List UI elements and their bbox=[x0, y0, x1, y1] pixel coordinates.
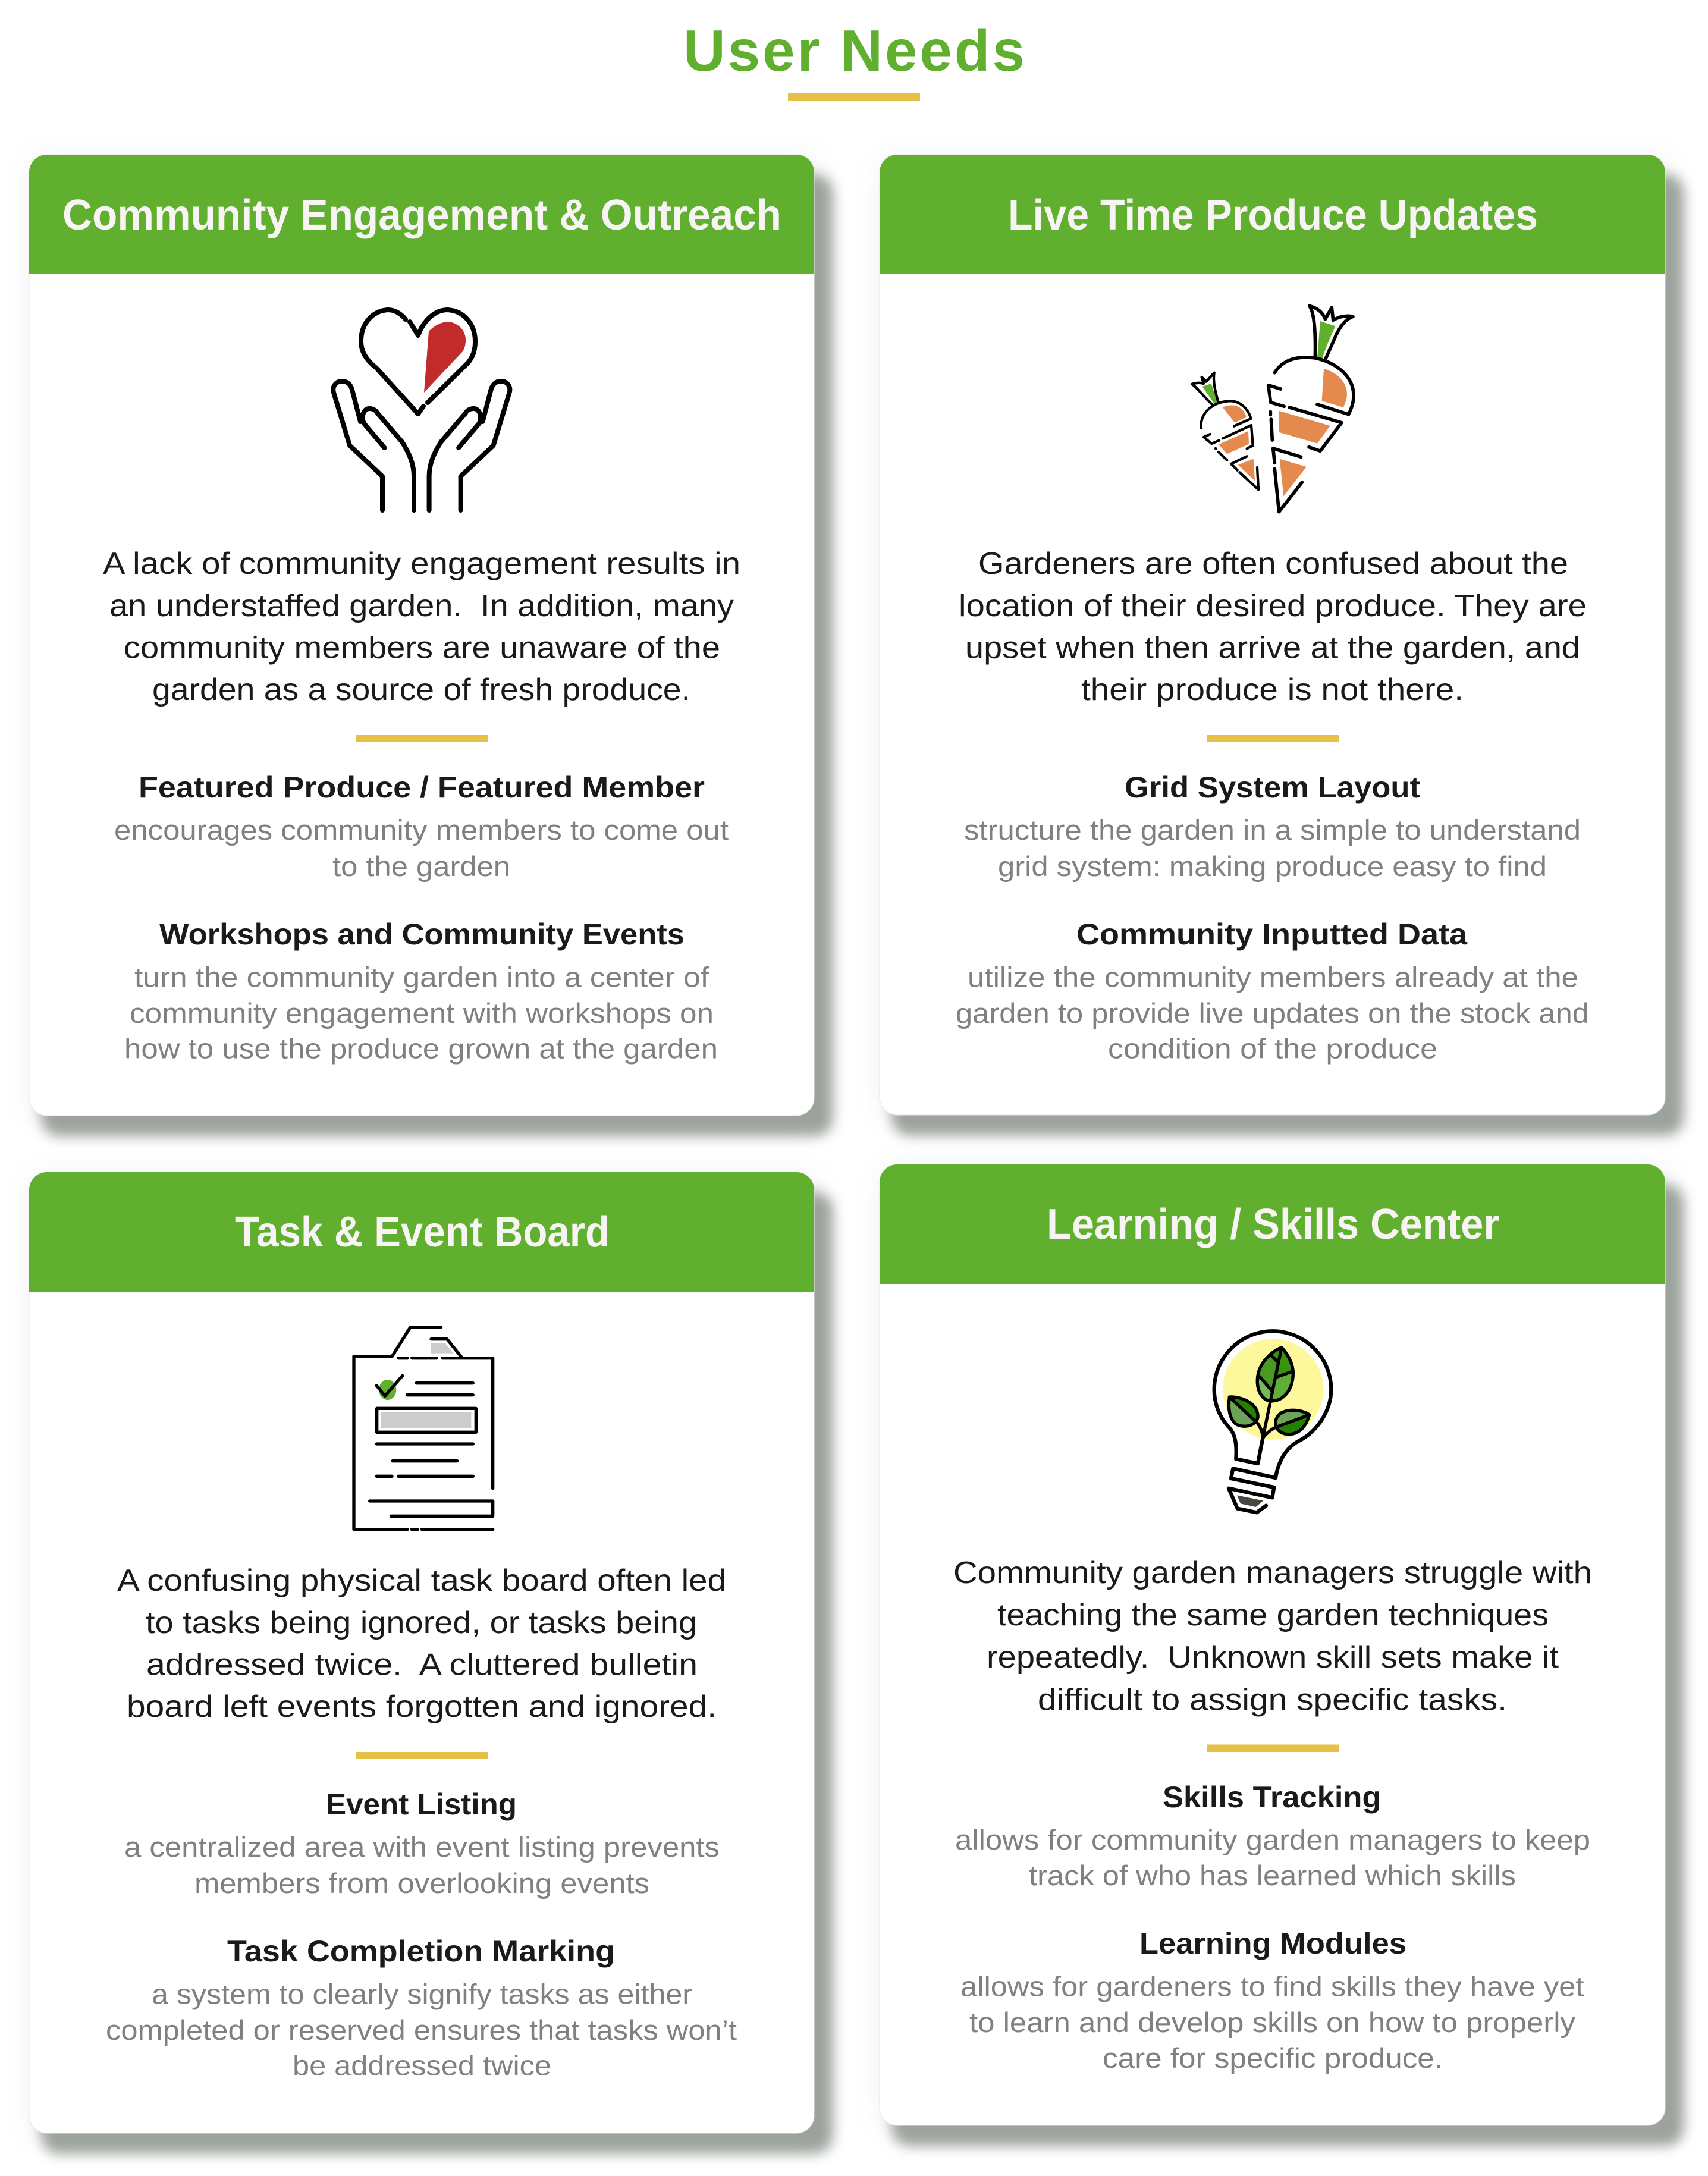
problem statement: A confusing physical task board often led bbox=[117, 1563, 726, 1598]
solution: Grid System Layout: Grid System Layout bbox=[1125, 771, 1420, 804]
divider bbox=[1207, 735, 1339, 742]
card header band bbox=[880, 1164, 1665, 1284]
solution: Skills Tracking: allows for community garden managers to keep bbox=[955, 1824, 1590, 1855]
solution: Workshops: Workshops and Community Events bbox=[159, 918, 685, 951]
solution: Grid System Layout: grid system: making produce easy to find bbox=[998, 850, 1547, 882]
solution: Community Inputted Data: utilize the community members already at the bbox=[968, 961, 1578, 993]
solution: Workshops: how to use the produce grown at the garden bbox=[124, 1032, 718, 1065]
solution: Skills Tracking: Skills Tracking bbox=[1163, 1781, 1381, 1814]
solution: Learning Modules bbox=[960, 1927, 1584, 2074]
solution: Featured Produce: to the garden bbox=[332, 850, 510, 882]
problem statement bbox=[953, 1556, 1592, 1717]
solution: Task Completion Marking: be addressed twice bbox=[293, 2049, 551, 2081]
panel: Learning / Skills Center bbox=[880, 1164, 1665, 2125]
problem statement: community members are unaware of the bbox=[124, 630, 720, 665]
problem statement: Community garden managers struggle with bbox=[953, 1556, 1592, 1590]
problem statement: an understaffed garden. In addition, many bbox=[109, 589, 734, 623]
panel: Community Engagement & Outreach bbox=[29, 155, 814, 1116]
card background bbox=[880, 1164, 1665, 2125]
solution: Grid System Layout bbox=[964, 771, 1581, 882]
solution: Community Inputted Data: Community Inputted Data bbox=[1076, 918, 1468, 951]
title underline bbox=[788, 93, 920, 101]
problem statement bbox=[103, 547, 740, 707]
panel: Task & Event Board bbox=[29, 1172, 814, 2133]
solution: Learning Modules: care for specific produce. bbox=[1103, 2042, 1443, 2074]
title: User Needs: User Needs bbox=[683, 18, 1025, 83]
icon: carrots bbox=[1192, 306, 1354, 512]
problem statement: addressed twice. A cluttered bulletin bbox=[146, 1647, 698, 1682]
solution: Community Inputted Data: condition of the produce bbox=[1108, 1032, 1437, 1065]
solution: Task Completion Marking: Task Completion Marking bbox=[227, 1935, 615, 1968]
solution: Task Completion Marking bbox=[106, 1935, 737, 2081]
card heading: Live Time Produce Updates bbox=[1008, 191, 1538, 239]
divider bbox=[356, 735, 488, 742]
solution: Featured Produce: encourages community members to come out bbox=[114, 814, 729, 846]
divider bbox=[1207, 1745, 1339, 1752]
problem statement: difficult to assign specific tasks. bbox=[1038, 1683, 1507, 1717]
solution: Featured Produce bbox=[114, 771, 729, 882]
problem statement: upset when then arrive at the garden, and bbox=[965, 630, 1580, 665]
icon: light bulb with plant bbox=[1214, 1331, 1331, 1512]
solution: Workshops: community engagement with workshops on bbox=[130, 997, 714, 1029]
solution: Event Listing: Event Listing bbox=[326, 1788, 517, 1821]
solution: Skills Tracking bbox=[955, 1781, 1590, 1891]
solution: Event Listing bbox=[124, 1788, 720, 1899]
problem statement bbox=[959, 547, 1587, 707]
card heading: Task & Event Board bbox=[235, 1208, 610, 1256]
panel: Live Time Produce Updates bbox=[880, 155, 1665, 1115]
solution: Featured Produce: Featured Produce / Featured Member bbox=[139, 771, 705, 804]
problem statement: repeatedly. Unknown skill sets make it bbox=[987, 1640, 1559, 1675]
solution: Learning Modules: Learning Modules bbox=[1139, 1927, 1406, 1960]
problem statement: A lack of community engagement results in bbox=[103, 547, 740, 581]
icon: hands holding heart bbox=[333, 310, 510, 510]
solution: Workshops bbox=[124, 918, 718, 1065]
problem statement: their produce is not there. bbox=[1081, 673, 1464, 707]
problem statement: board left events forgotten and ignored. bbox=[127, 1690, 717, 1724]
card background bbox=[29, 155, 814, 1116]
icon: clipboard checklist bbox=[354, 1327, 493, 1530]
solution: Learning Modules: allows for gardeners to find skills they have yet bbox=[960, 1971, 1584, 2002]
card heading: Community Engagement & Outreach bbox=[62, 191, 781, 239]
problem statement: Gardeners are often confused about the bbox=[978, 547, 1568, 581]
card header band bbox=[29, 1172, 814, 1292]
solution: Learning Modules: to learn and develop skills on how to properly bbox=[969, 2007, 1576, 2038]
card background bbox=[29, 1172, 814, 2133]
card background bbox=[880, 155, 1665, 1115]
card heading: Learning / Skills Center bbox=[1047, 1201, 1499, 1248]
problem statement: teaching the same garden techniques bbox=[997, 1598, 1549, 1632]
divider bbox=[356, 1752, 488, 1759]
problem statement: to tasks being ignored, or tasks being bbox=[146, 1606, 697, 1640]
card header band bbox=[29, 155, 814, 274]
solution: Skills Tracking: track of who has learned which skills bbox=[1029, 1860, 1516, 1891]
problem statement: garden as a source of fresh produce. bbox=[152, 673, 690, 707]
solution: Workshops: turn the community garden into a center of bbox=[134, 961, 709, 993]
solution: Event Listing: members from overlooking events bbox=[194, 1867, 649, 1899]
card header band bbox=[880, 155, 1665, 274]
solution: Task Completion Marking: a system to clearly signify tasks as either bbox=[152, 1978, 692, 2010]
solution: Community Inputted Data: garden to provide live updates on the stock and bbox=[956, 997, 1589, 1029]
problem statement: location of their desired produce. They are bbox=[959, 589, 1587, 623]
solution: Event Listing: a centralized area with event listing prevents bbox=[124, 1831, 720, 1863]
solution: Task Completion Marking: completed or reserved ensures that tasks won’t bbox=[106, 2014, 737, 2046]
solution: Community Inputted Data bbox=[956, 918, 1589, 1065]
problem statement bbox=[117, 1563, 726, 1724]
solution: Grid System Layout: structure the garden in a simple to understand bbox=[964, 814, 1581, 846]
